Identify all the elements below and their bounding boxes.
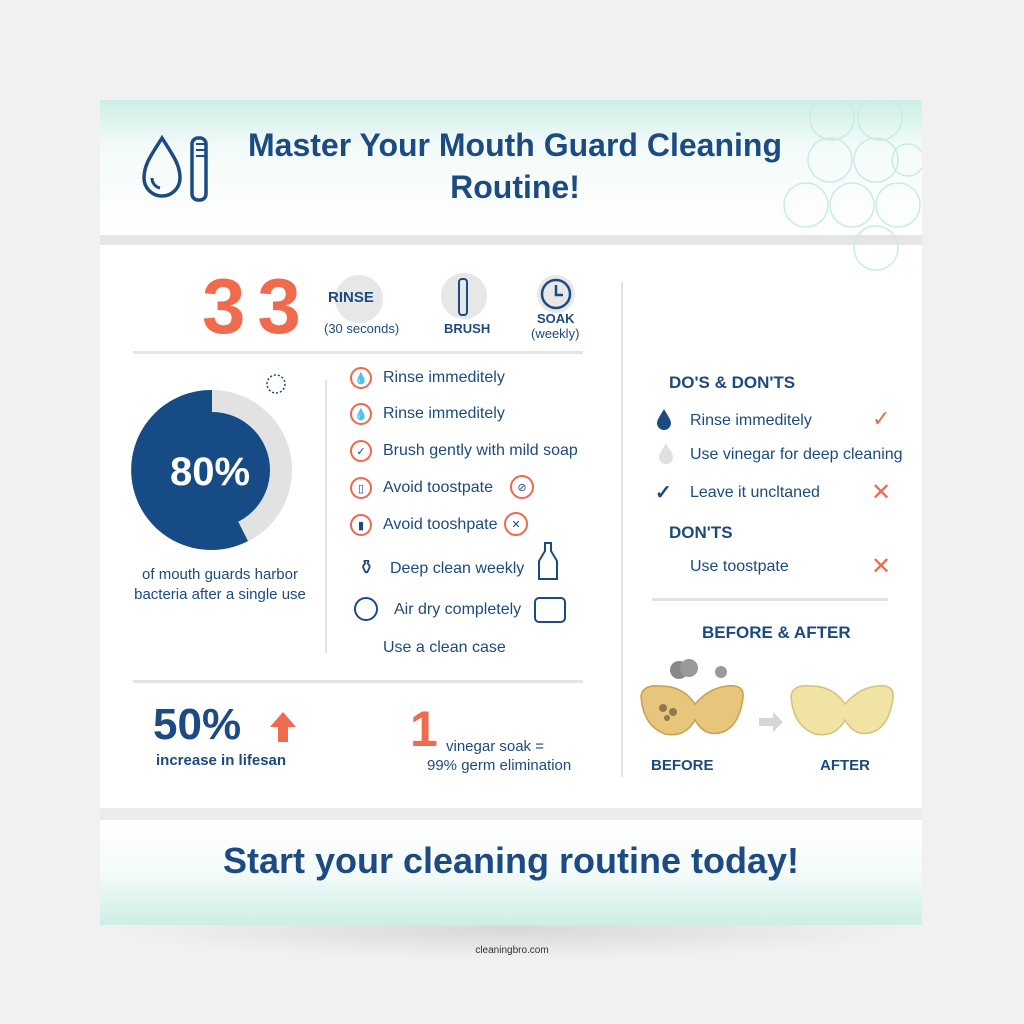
panel: do's and don'ts: ✕	[871, 479, 891, 506]
steps list: Use a clean case	[383, 639, 506, 656]
panel: do's and don'ts: DON'TS	[669, 523, 733, 542]
step counter row: (weekly)	[531, 326, 579, 341]
donut caption: of mouth guards harbor bacteria after a single use	[134, 566, 306, 603]
steps list: ▯	[358, 482, 364, 494]
steps list: ▮	[358, 520, 364, 532]
stat: 50%	[153, 700, 296, 769]
panel: do's and don'ts	[655, 373, 903, 580]
card	[100, 100, 922, 925]
panel: before & after: BEFORE & AFTER	[702, 623, 851, 642]
footer call to action	[100, 820, 922, 925]
donut chart	[131, 374, 292, 550]
steps list: ✓	[356, 446, 366, 458]
steps list: ⊘	[517, 482, 527, 494]
steps list: Avoid toostpate	[383, 479, 493, 496]
steps list: Air dry completely	[394, 601, 521, 618]
steps list: 💧	[354, 372, 368, 384]
steps list: ⚱	[358, 557, 375, 579]
panel: do's and don'ts: Use toostpate	[690, 558, 789, 575]
panel: do's and don'ts: ✓	[655, 482, 672, 504]
steps list: Deep clean weekly	[390, 560, 524, 577]
icon: drop and toothbrush	[142, 134, 208, 202]
step counter row: 33	[202, 262, 313, 350]
panel: do's and don'ts: ✕	[871, 553, 891, 580]
header band	[100, 100, 922, 235]
stat: 50%: 50%	[153, 700, 241, 749]
steps list	[350, 367, 578, 656]
panel: before & after: BEFORE	[651, 757, 714, 774]
title	[248, 127, 782, 205]
footer call to action: Start your cleaning routine today!	[223, 840, 799, 881]
source credit: cleaningbro.com	[475, 945, 549, 956]
title: Master Your Mouth Guard Cleaning	[248, 127, 782, 163]
steps list: Rinse immeditely	[383, 369, 505, 386]
decorative bubbles	[783, 104, 922, 271]
steps list: 💧	[354, 408, 368, 420]
panel: before & after: AFTER	[820, 757, 870, 774]
panel: do's and don'ts: Rinse immeditely	[690, 412, 812, 429]
step counter row: SOAK	[537, 311, 575, 326]
stat: vinegar: 1	[410, 701, 438, 757]
step counter row: (30 seconds)	[324, 321, 399, 336]
step counter row: BRUSH	[444, 321, 490, 336]
stat: vinegar: 99% germ elimination	[427, 757, 571, 774]
title: Routine!	[450, 169, 580, 205]
panel: do's and don'ts: Leave it uncltaned	[690, 484, 820, 501]
step counter row: RINSE	[328, 289, 374, 306]
card shadow	[110, 900, 910, 960]
donut chart: 80%	[170, 450, 250, 494]
panel: do's and don'ts: ✓	[872, 406, 890, 431]
stat: 50%: increase in lifesan	[156, 752, 286, 769]
steps list: Avoid tooshpate	[383, 516, 497, 533]
panel: do's and don'ts: DO'S & DON'TS	[669, 373, 795, 392]
stat: vinegar: vinegar soak =	[446, 738, 544, 755]
panel: do's and don'ts: Use vinegar for deep cleaning	[690, 446, 903, 463]
steps list: Brush gently with mild soap	[383, 442, 578, 459]
step counter row	[202, 262, 579, 350]
stat: vinegar	[410, 701, 571, 774]
steps list: Rinse immeditely	[383, 405, 505, 422]
steps list: ✕	[511, 518, 521, 530]
panel: before & after	[640, 623, 894, 774]
